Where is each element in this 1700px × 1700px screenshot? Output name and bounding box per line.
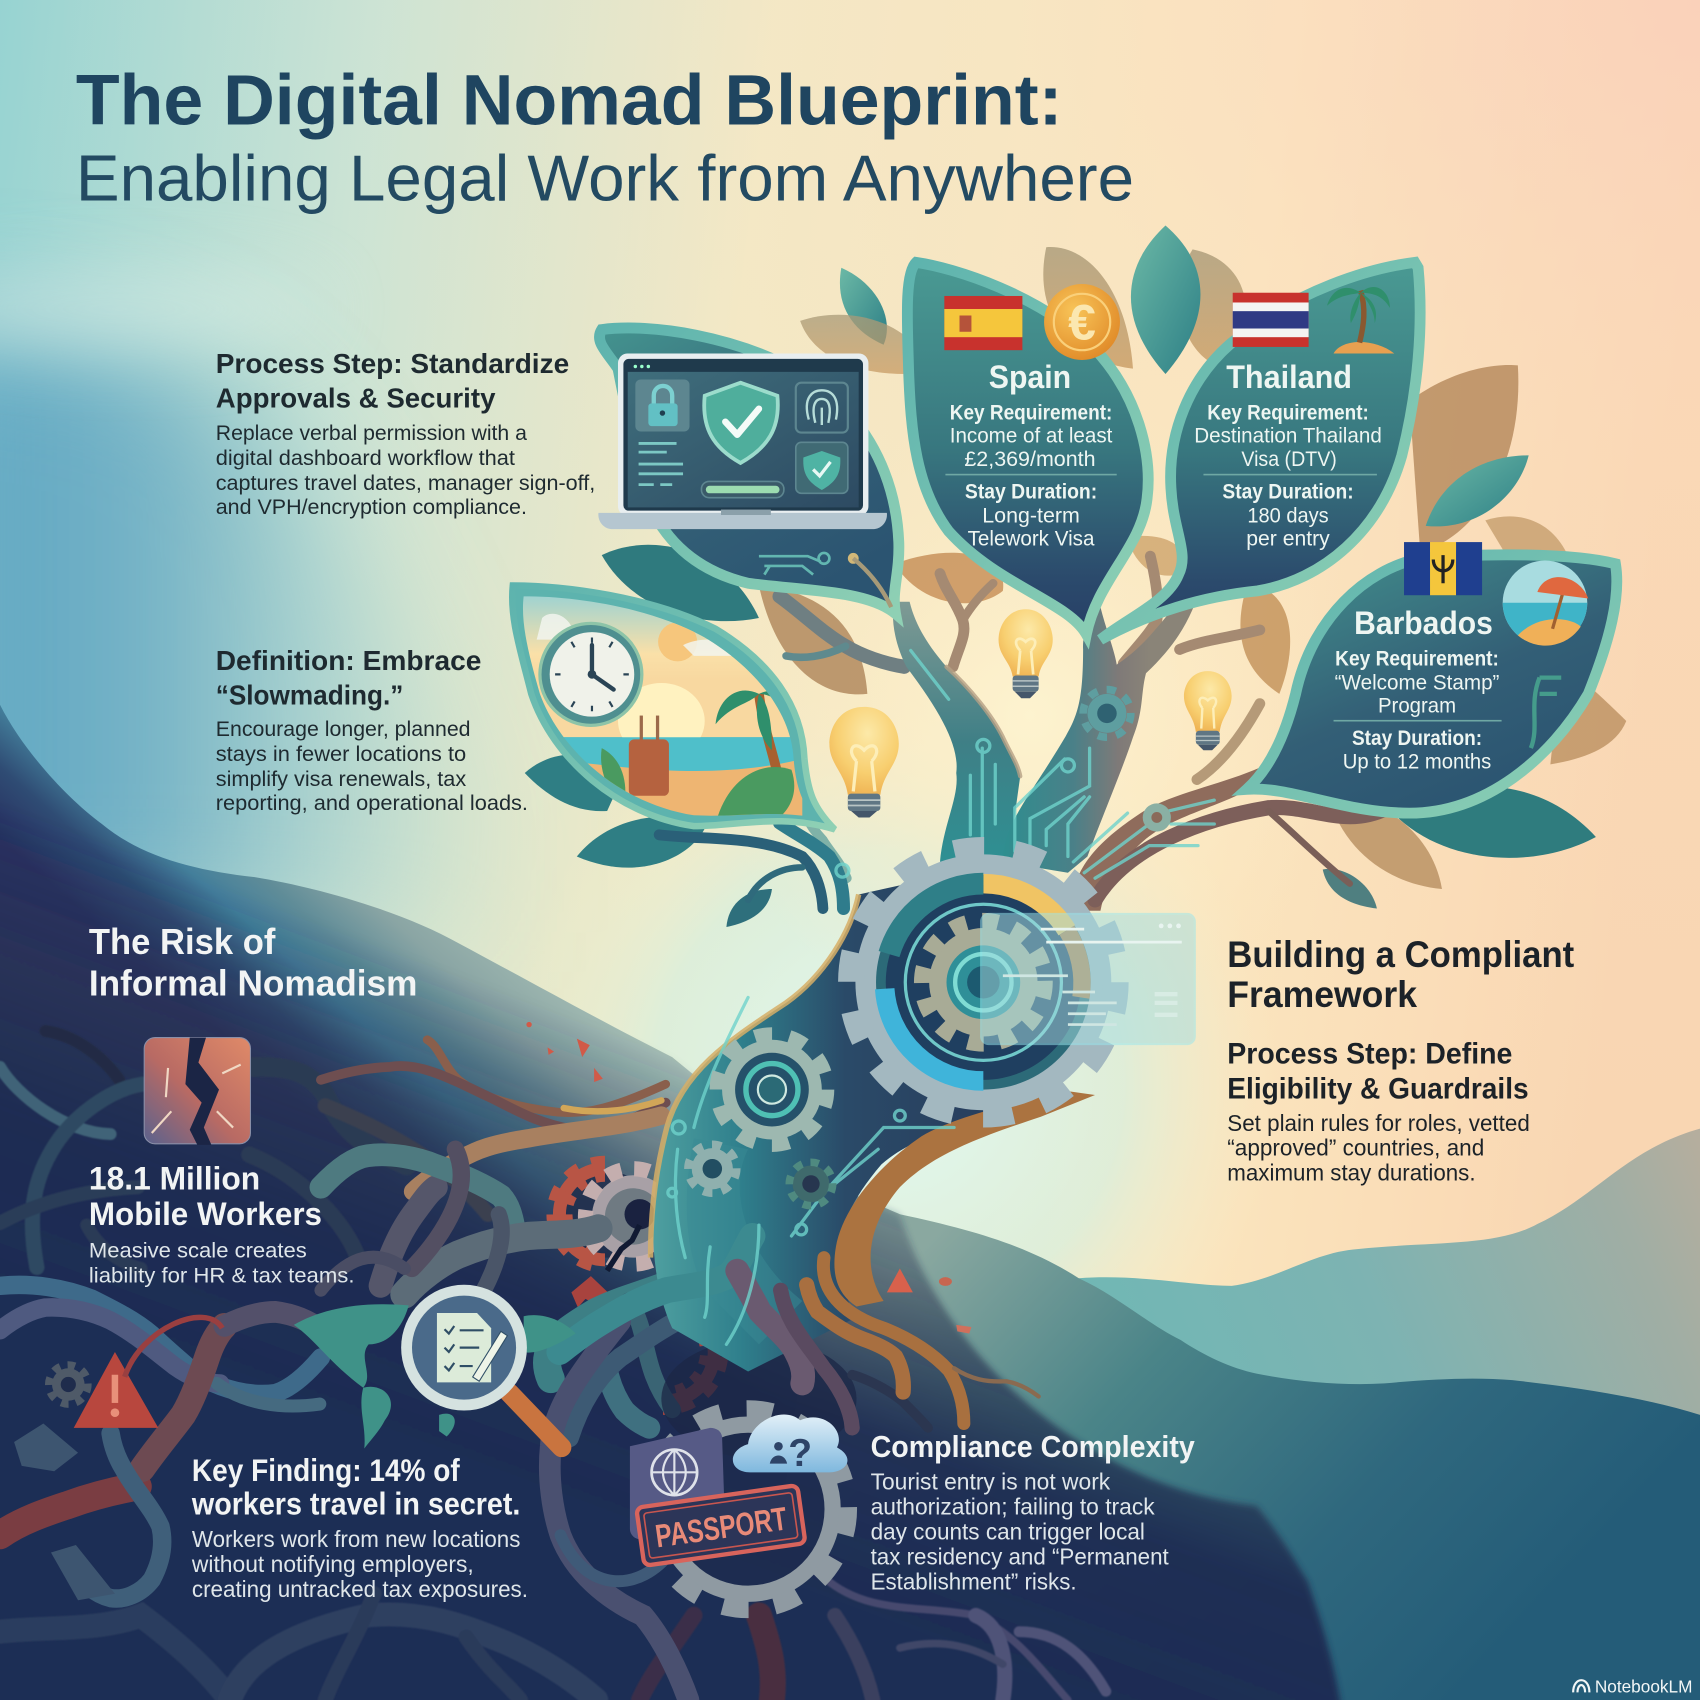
text block: standardize approvals: Approvals & Security [216, 382, 496, 414]
icon: island outline [1531, 678, 1561, 748]
heading: risk of informal nomadism: Informal Nomadism [89, 963, 417, 1003]
icon: euro coin [1044, 284, 1120, 360]
text block: mobile workers stat: liability for HR & tax teams. [89, 1263, 355, 1288]
text block: compliance complexity [871, 1431, 1195, 1594]
icon: small gear by warning [49, 1365, 88, 1404]
text block: standardize approvals: captures travel dates, manager sign-off, [216, 470, 595, 495]
icon: laptop with security dashboard [598, 353, 887, 529]
text: Barbados details: Key Requirement: [1335, 646, 1499, 671]
text block: slowmading definition: “Slowmading.” [216, 679, 403, 711]
text block: building a compliant framework: Set plain rules for roles, vetted [1227, 1110, 1530, 1136]
icon: passport book [630, 1428, 724, 1540]
text block: building a compliant framework: “approved” countries, and [1227, 1135, 1484, 1161]
red gear fragment [571, 1276, 714, 1401]
text block: building a compliant framework: Building a Compliant [1227, 934, 1574, 975]
panel: slowmading leaf scene [510, 585, 835, 835]
branch node [1143, 803, 1171, 832]
text block: slowmading definition: reporting, and operational loads. [216, 790, 528, 815]
text block: compliance complexity: Compliance Complexity [871, 1431, 1195, 1464]
icon: beach circle [1503, 561, 1588, 646]
gear: trunk small [688, 1145, 736, 1193]
text: Barbados details: Up to 12 months [1343, 749, 1491, 774]
holographic dashboard panel [981, 914, 1195, 1044]
tangled roots: far layer [0, 1031, 1106, 1700]
text block: slowmading definition: Definition: Embrace [216, 644, 481, 676]
icon: passport gear [648, 1409, 848, 1609]
dark hollow under trunk [661, 1339, 857, 1458]
text block: compliance complexity: day counts can trigger local [871, 1519, 1145, 1545]
tangled roots: mid layer [0, 1040, 720, 1700]
text block: standardize approvals: Replace verbal permission with a [216, 420, 528, 445]
text block: compliance complexity: authorization; failing to track [871, 1494, 1155, 1520]
tree branches [659, 556, 1388, 911]
text: Spain details: £2,369/month [964, 446, 1096, 471]
title [76, 61, 1134, 215]
tangled roots: front layer [559, 1236, 1039, 1428]
text block: building a compliant framework: Framework [1227, 974, 1418, 1015]
icon: Barbados flag [1404, 542, 1482, 595]
text: Spain details: Long-term [982, 503, 1080, 528]
text block: building a compliant framework [1227, 934, 1574, 1186]
text: Barbados details: Stay Duration: [1352, 725, 1482, 750]
text block: slowmading definition: stays in fewer locations to [216, 741, 466, 766]
text: Spain details: Key Requirement: [950, 400, 1112, 425]
text: Barbados details [1334, 605, 1502, 774]
text: Spain details [945, 359, 1117, 550]
beach scene [523, 596, 802, 816]
gear: trunk dark [789, 1162, 833, 1206]
icon: cracked card [144, 1038, 250, 1145]
broken gear icon [559, 1169, 681, 1271]
text block: key finding: without notifying employers, [191, 1551, 474, 1577]
text: Barbados details: Barbados [1354, 605, 1493, 641]
icon: Spain flag [944, 296, 1022, 350]
icon: cloud with question mark: ? [788, 1432, 812, 1475]
lightbulb left [829, 707, 899, 817]
tree leaves behind panels [525, 226, 1626, 927]
text block: slowmading definition: Encourage longer, planned [216, 716, 471, 741]
text: Thailand details: per entry [1246, 525, 1330, 550]
text: Spain details: Income of at least [950, 422, 1112, 447]
red debris [526, 1022, 971, 1334]
text block: compliance complexity: tax residency and “Permanent [871, 1543, 1169, 1569]
text block: slowmading definition [216, 644, 528, 815]
text block: key finding: creating untracked tax exposures. [192, 1576, 528, 1602]
icon: clock [540, 623, 642, 725]
icon: magnifying glass with checklist [401, 1285, 562, 1447]
tree trunk [651, 867, 1095, 1371]
title: The Digital Nomad Blueprint: [76, 61, 1062, 141]
text block: compliance complexity: Establishment” risks. [871, 1568, 1077, 1594]
icon: cloud with question mark [733, 1415, 847, 1475]
text: Thailand details: Key Requirement: [1207, 400, 1369, 425]
text: Spain details: Stay Duration: [965, 479, 1097, 504]
background hills [0, 705, 1700, 1700]
text: Thailand details [1194, 359, 1382, 550]
heading: risk of informal nomadism: The Risk of [89, 922, 275, 962]
text block: mobile workers stat: Mobile Workers [89, 1196, 322, 1232]
text: Thailand details: Visa (DTV) [1241, 446, 1337, 471]
text block: key finding: Key Finding: 14% of [192, 1453, 460, 1488]
text block: building a compliant framework: Eligibility & Guardrails [1227, 1073, 1529, 1105]
text block: key finding: Workers work from new locations [192, 1526, 520, 1552]
text block: building a compliant framework: maximum stay durations. [1227, 1160, 1476, 1186]
text: Thailand details: 180 days [1247, 503, 1329, 528]
text block: standardize approvals [216, 347, 595, 519]
panel: Spain leaf [907, 262, 1148, 634]
text block: standardize approvals: Process Step: Standardize [216, 347, 569, 379]
text: Thailand details: Thailand [1226, 359, 1352, 395]
icon: world map [294, 1304, 576, 1448]
icon: passport stamp: PASSPORT [653, 1500, 789, 1554]
panel: Barbados leaf [1247, 542, 1617, 813]
text block: compliance complexity: Tourist entry is not work [871, 1469, 1111, 1495]
text: Barbados details: “Welcome Stamp” [1335, 670, 1499, 695]
icon: passport stamp [636, 1485, 805, 1566]
title: Enabling Legal Work from Anywhere [76, 142, 1134, 215]
text block: slowmading definition: simplify visa renewals, tax [216, 766, 466, 791]
text: Spain details: Telework Visa [968, 525, 1095, 550]
text block: mobile workers stat: 18.1 Million [89, 1160, 260, 1196]
lightbulb centre [999, 609, 1053, 698]
heading: risk of informal nomadism [89, 922, 417, 1003]
text: Thailand details: Stay Duration: [1222, 479, 1354, 504]
icon: Thailand flag [1233, 293, 1309, 347]
icon: palm on island [1327, 287, 1394, 353]
lightbulb right [1184, 671, 1232, 750]
NotebookLM watermark: NotebookLM [1595, 1676, 1692, 1696]
trunk circuit lines [668, 651, 1214, 1344]
icon: euro coin: € [1068, 294, 1096, 350]
text: Spain details: Spain [989, 359, 1071, 395]
text block: mobile workers stat [89, 1160, 355, 1288]
panel: Thailand leaf [1100, 262, 1420, 640]
gear: small on branch [1083, 690, 1131, 737]
red arc [125, 1317, 222, 1377]
icon: warning triangle [74, 1352, 158, 1428]
text block: mobile workers stat: Measive scale creates [89, 1238, 307, 1263]
text block: building a compliant framework: Process Step: Define [1227, 1039, 1512, 1071]
panel: laptop leaf [599, 328, 899, 614]
gear: main compliance gear [851, 850, 1116, 1115]
text block: key finding: workers travel in secret. [191, 1487, 520, 1522]
gear: trunk mid [718, 1035, 826, 1144]
text block: standardize approvals: and VPH/encryption compliance. [216, 494, 527, 519]
text: Barbados details: Program [1378, 692, 1456, 717]
text: Thailand details: Destination Thailand [1194, 422, 1382, 447]
text block: key finding [191, 1453, 528, 1602]
text block: standardize approvals: digital dashboard workflow that [216, 445, 515, 470]
